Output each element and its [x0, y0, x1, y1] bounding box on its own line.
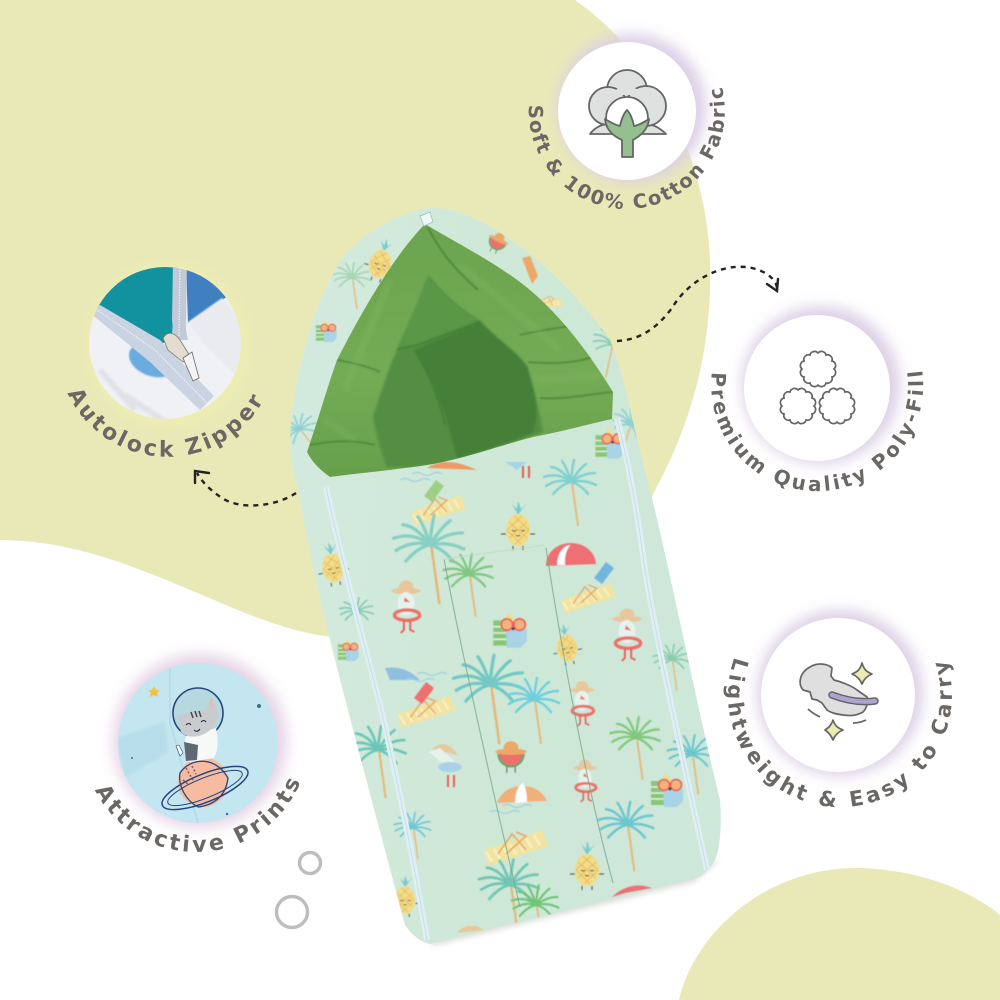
curved label: Autolock Zipper: [67, 390, 261, 457]
upper head panel: [402, 282, 473, 346]
star: [148, 686, 160, 697]
right zipper: [617, 418, 707, 870]
halo: [88, 265, 248, 425]
large olive background blob: [0, 0, 710, 640]
hood fold shadows: [310, 228, 612, 445]
kitten print photo: [118, 663, 278, 823]
feature: lightweight: [724, 604, 954, 808]
icon: cotton boll: [589, 70, 666, 157]
feature: poly-fill: [711, 300, 924, 492]
bag shadow: [430, 860, 720, 946]
fabric print motifs: [276, 229, 714, 945]
quilted panel seams: [444, 545, 613, 907]
planet: [178, 757, 228, 807]
curved label: Premium Quality Poly-Fill: [711, 372, 924, 492]
feature: cotton fabric: [528, 28, 725, 209]
left zipper: [326, 487, 427, 940]
feature: autolock zipper: [67, 267, 261, 457]
hood outer padding: [307, 225, 613, 477]
large decorative ring: [276, 896, 308, 928]
halo: [757, 610, 923, 776]
white disc: [744, 315, 890, 461]
kitten head: [177, 698, 217, 737]
zipper photo: [89, 267, 241, 419]
kitten body: [185, 728, 218, 762]
bottom right olive blob: [679, 868, 1000, 1000]
halo: [113, 654, 287, 828]
curved label: Soft & 100% Cotton Fabric: [528, 88, 725, 209]
icon: feather with sparkles: [800, 663, 875, 740]
dashed arrow to zipper: [195, 471, 296, 505]
dashed arrow to poly-fill: [617, 267, 778, 341]
curved label: Attractive Prints: [94, 778, 299, 852]
halo: [558, 34, 706, 182]
product: sleeping bag: [276, 208, 721, 946]
white disc: [558, 42, 696, 180]
hood: green inner lining: [307, 225, 613, 477]
zipper pull top: [420, 212, 433, 226]
white disc: [761, 618, 915, 772]
icon: three fill puffs: [780, 351, 855, 424]
inner centre panel: [415, 322, 536, 458]
small decorative ring: [300, 852, 320, 874]
bag body: [290, 208, 721, 944]
halo: [742, 306, 900, 464]
hood inner recess: [373, 275, 543, 467]
feature: attractive prints: [94, 648, 299, 852]
helmet: [173, 688, 223, 738]
hood highlights: [353, 330, 542, 365]
curved label: Lightweight & Easy to Carry: [724, 658, 954, 808]
